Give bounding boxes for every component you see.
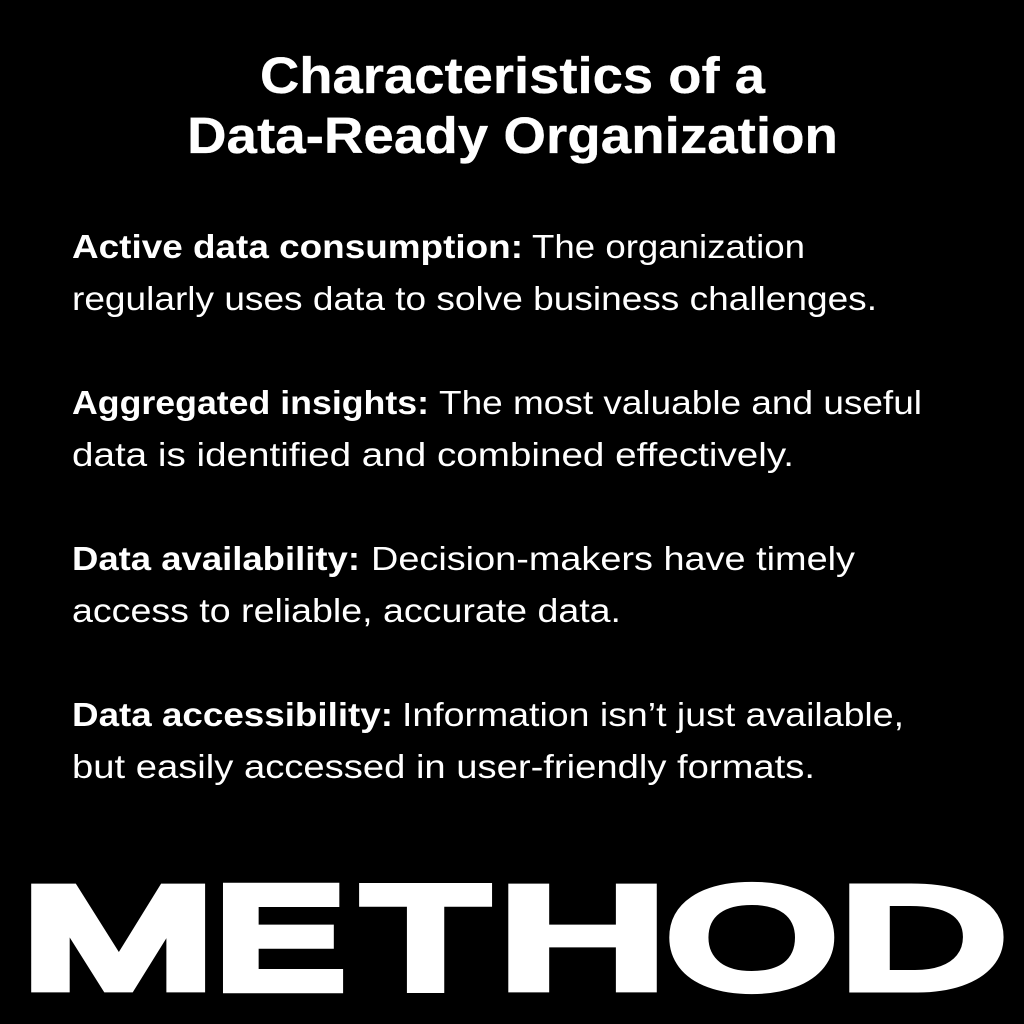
text block: data accessibility: but easily accessed in user-friendly formats. bbox=[72, 748, 815, 785]
title: Data-Ready Organization bbox=[187, 107, 838, 164]
text block: aggregated insights: data is identified and combined effectively. bbox=[72, 436, 794, 473]
title: Characteristics of a bbox=[260, 47, 766, 104]
text block: aggregated insights bbox=[72, 384, 922, 473]
text block: data availability: Data availability: bbox=[72, 540, 360, 577]
text block: data accessibility: Data accessibility: bbox=[72, 696, 393, 733]
text block: data availability: Decision-makers have timely bbox=[371, 540, 856, 577]
logo: METHOD wordmark: M bbox=[22, 859, 214, 1017]
text block: data availability bbox=[72, 540, 856, 629]
text block: data availability: access to reliable, accurate data. bbox=[72, 592, 621, 629]
logo: METHOD wordmark: O bbox=[669, 860, 835, 1017]
logo: METHOD wordmark bbox=[22, 859, 1005, 1017]
text block: active data consumption bbox=[72, 228, 877, 317]
logo: METHOD wordmark: H bbox=[499, 859, 666, 1017]
logo: METHOD wordmark: E bbox=[217, 859, 342, 1017]
text block: active data consumption: The organization bbox=[532, 228, 805, 265]
text block: aggregated insights: Aggregated insights: bbox=[72, 384, 429, 421]
text block: data accessibility: Information isn’t just available, bbox=[402, 696, 904, 733]
text block: data accessibility bbox=[72, 696, 904, 785]
text block: active data consumption: Active data consumption: bbox=[72, 228, 523, 265]
logo: METHOD wordmark: D bbox=[840, 859, 1005, 1017]
text block: aggregated insights: The most valuable and useful bbox=[439, 384, 922, 421]
title bbox=[187, 47, 838, 164]
logo: METHOD wordmark: T bbox=[364, 859, 487, 1016]
text block: active data consumption: regularly uses data to solve business challenges. bbox=[72, 280, 877, 317]
